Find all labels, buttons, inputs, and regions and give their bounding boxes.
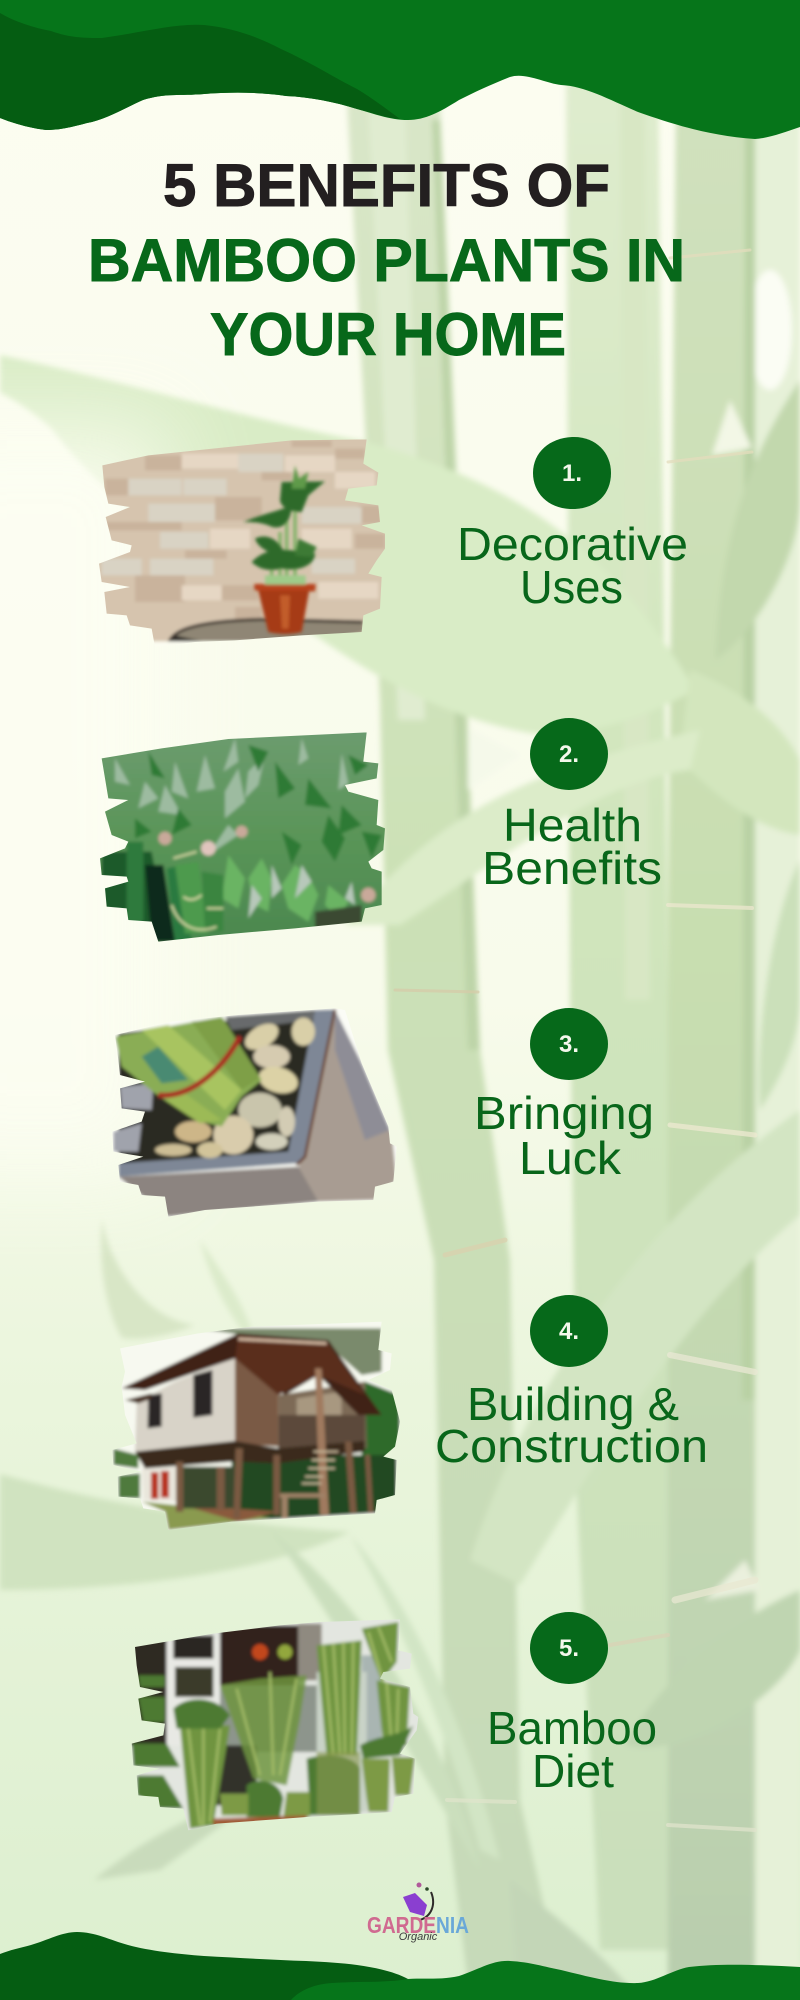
- logo: Gardenia Organic: [367, 1882, 469, 1943]
- step 5: Bamboo: [487, 1702, 657, 1754]
- step 2: Benefits: [482, 842, 662, 894]
- number badge 1: [533, 437, 611, 509]
- photo: stone wall with potted bamboo: [99, 440, 385, 644]
- step 1: Decorative: [457, 518, 688, 570]
- step 5: Diet: [532, 1745, 614, 1797]
- photo: bamboo in pebble planter: [112, 1008, 396, 1216]
- title: BAMBOO PLANTS IN: [88, 227, 685, 294]
- logo: Gardenia Organic: GARDENIA: [367, 1912, 469, 1938]
- step 4: Building &: [467, 1378, 679, 1430]
- number badge 5: [530, 1612, 608, 1684]
- step 3: [474, 1008, 654, 1184]
- step 4: Construction: [435, 1420, 708, 1472]
- photo: bamboo diet market stand: [132, 1620, 418, 1830]
- step 2: Health: [503, 799, 642, 851]
- step 2: [482, 718, 662, 894]
- number badge 2: 2.: [559, 741, 579, 768]
- photo: stilt house: [112, 1322, 400, 1530]
- step 3: Luck: [519, 1132, 622, 1184]
- number badge 4: 4.: [559, 1318, 579, 1345]
- number badge 1: 1.: [562, 460, 582, 487]
- logo: Gardenia Organic: Organic: [399, 1931, 438, 1943]
- title: [88, 152, 685, 368]
- number badge 5: 5.: [559, 1635, 579, 1662]
- title: 5 BENEFITS OF: [163, 152, 610, 219]
- number badge 3: 3.: [559, 1031, 579, 1058]
- title: YOUR HOME: [210, 301, 566, 368]
- bottom wave: [0, 1932, 800, 2000]
- potted plant: [243, 465, 325, 634]
- photo: lucky bamboo bundles: [100, 732, 385, 942]
- step 3: Bringing: [474, 1087, 654, 1139]
- number badge 3: [530, 1008, 608, 1080]
- step 1: Uses: [520, 561, 623, 613]
- number badge 4: [530, 1295, 608, 1367]
- top wave: [0, 0, 800, 139]
- step 4: [435, 1295, 708, 1472]
- step 1: [457, 437, 688, 613]
- step 5: [487, 1612, 657, 1797]
- number badge 2: [530, 718, 608, 790]
